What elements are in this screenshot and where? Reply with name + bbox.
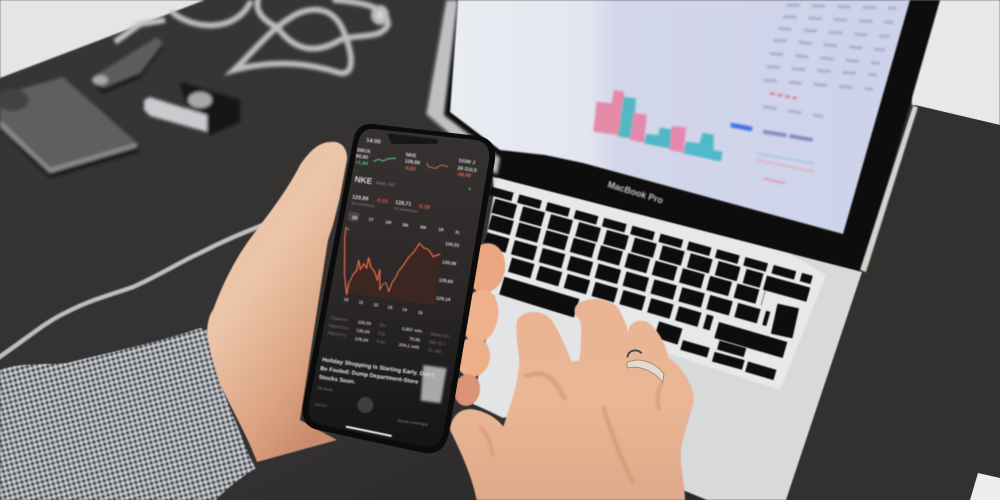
chart x axis labels: 11 <box>359 299 364 305</box>
SBUX ticker: 90,80 <box>355 153 369 161</box>
statistics table: Min 52 t <box>429 339 446 347</box>
statistics table: Najwyższy <box>328 323 351 331</box>
news headline: Stocks Soon. <box>318 375 356 386</box>
laptop base <box>473 177 862 500</box>
SBUX ticker: 129,88 <box>404 158 421 166</box>
statistics table: 129,00 <box>357 319 372 326</box>
statistics table: Najniższy <box>327 330 348 338</box>
SBUX ticker: +1,44 <box>355 159 368 167</box>
statistics table: Kap. <box>377 339 386 345</box>
price chart area <box>344 228 440 305</box>
status bar time: 14:00 <box>366 138 381 146</box>
long key left <box>502 286 577 308</box>
time range tabs: 1M <box>385 219 392 225</box>
chart y axis labels: 130,52 <box>445 241 460 248</box>
price chart line <box>344 227 440 295</box>
chart y axis labels <box>436 241 460 302</box>
price block: 128,71 <box>395 200 412 208</box>
chart x axis labels: 10 <box>344 297 350 302</box>
home indicator <box>346 427 392 436</box>
phone screen content <box>314 133 477 436</box>
chart x axis labels <box>344 297 424 315</box>
bottom row keys <box>657 329 680 337</box>
white cable tangle <box>173 0 388 73</box>
round share button <box>357 397 373 413</box>
time range tabs: 6M <box>420 224 427 230</box>
chart x axis labels: 13 <box>387 304 393 310</box>
statistics table <box>327 315 451 354</box>
phone screen content: Rynek zamknięty <box>398 418 428 427</box>
white wall top right <box>905 0 1000 126</box>
NKE heading: NKE <box>354 174 373 186</box>
statistics table: 3,857 mln <box>402 326 423 334</box>
NKE sparkline <box>427 163 448 168</box>
SBUX ticker: 28 310,5 <box>457 165 477 174</box>
lid silver edge left <box>426 0 500 175</box>
finger tattoo <box>627 350 642 357</box>
phone screen content: yahoo! <box>314 401 327 408</box>
right hand <box>450 299 694 500</box>
company name: NIKE, INC. <box>376 180 397 188</box>
price block: Po zamknięciu <box>394 206 418 214</box>
index finger <box>463 240 509 296</box>
chart y axis labels: 129,14 <box>436 295 451 302</box>
statistics table: 204,1 mld <box>399 342 420 350</box>
knuckle and tendon shading <box>480 374 662 483</box>
laptop screen <box>450 0 910 234</box>
statistics table: 128,69 <box>354 336 369 343</box>
dark mat right <box>785 105 1000 500</box>
middle letter key row <box>485 239 768 319</box>
price block: -0,03 <box>375 198 388 205</box>
lid silver edge right <box>860 106 918 272</box>
data table on laptop screen <box>757 5 897 183</box>
statistics table: C/Z <box>378 331 386 337</box>
chart x axis labels: 15 <box>418 310 424 315</box>
screen glare <box>421 365 447 403</box>
time range tabs: 1D <box>352 215 358 220</box>
statistics table: 130,60 <box>356 328 371 335</box>
speaker notch <box>387 133 438 144</box>
DOW ticker: DOW J <box>458 158 476 166</box>
trackpad <box>473 293 595 418</box>
laptop <box>426 0 940 500</box>
laptop lid bezel <box>426 0 940 272</box>
price block: Na zamknięciu <box>351 201 375 208</box>
bar chart on laptop screen <box>593 90 753 162</box>
price block <box>351 194 430 214</box>
white paper corner bottom right <box>970 473 1000 500</box>
chart y axis labels: 130,06 <box>442 259 457 266</box>
NKE ticker: NKE <box>405 152 417 160</box>
SBUX ticker: SBUX <box>356 147 372 155</box>
small silver and black device <box>144 82 240 135</box>
chart x axis labels: 12 <box>373 302 379 308</box>
time range tabs: 1T <box>368 217 374 222</box>
key fob <box>92 20 165 94</box>
phone screen <box>309 129 489 447</box>
statistics table: Otwarcie <box>330 315 349 323</box>
SBUX ticker <box>355 147 477 179</box>
checked shirt sleeve <box>0 328 256 500</box>
phone body <box>303 124 495 453</box>
lower letter key row <box>510 265 712 323</box>
background objects on desk <box>0 0 388 178</box>
chart y axis labels: 129,60 <box>439 277 454 284</box>
keyboard keys <box>485 191 812 375</box>
statistics table: Śr. obr. <box>428 345 443 354</box>
white wall top left <box>0 0 205 78</box>
chart x axis labels: 14 <box>402 307 408 312</box>
time range tabs <box>348 211 461 235</box>
SBUX ticker: -0,03 <box>404 165 416 173</box>
hand silhouette <box>450 299 694 500</box>
news headline: Holiday Shopping Is Starting Early. Don't <box>322 357 435 379</box>
time range tabs: 1R <box>438 227 445 233</box>
statistics table: Maks 52 t <box>431 331 451 339</box>
price block: 129,89 <box>352 194 369 203</box>
silver ring <box>627 360 664 383</box>
left hand fingers <box>451 240 509 408</box>
time range tabs: 2L <box>455 229 461 235</box>
statistics table: 70,86 <box>409 336 421 343</box>
upper letter key row <box>490 222 763 298</box>
lighter keyboard deck <box>484 178 826 390</box>
smartphone in hand <box>303 124 495 453</box>
SBUX sparkline <box>373 158 396 162</box>
statistics table: Div <box>379 322 387 328</box>
ring finger <box>453 334 493 380</box>
MacBook Pro logo text: MacBook Pro <box>606 179 665 206</box>
close button: × <box>467 187 472 193</box>
SBUX ticker: -28,09 <box>456 171 471 179</box>
news source: Fat News <box>317 386 333 392</box>
left hand palm <box>207 142 347 462</box>
news headline: Be Fooled: Dump Department-Store <box>320 366 419 386</box>
time range tabs: 3M <box>402 222 409 228</box>
number key row <box>493 206 762 281</box>
little finger <box>451 372 483 408</box>
function key row <box>490 191 812 280</box>
long white cable on desk <box>0 223 268 360</box>
smartphone lying face down <box>0 77 138 178</box>
price block: -0,28 <box>417 203 430 211</box>
middle finger <box>458 286 502 346</box>
